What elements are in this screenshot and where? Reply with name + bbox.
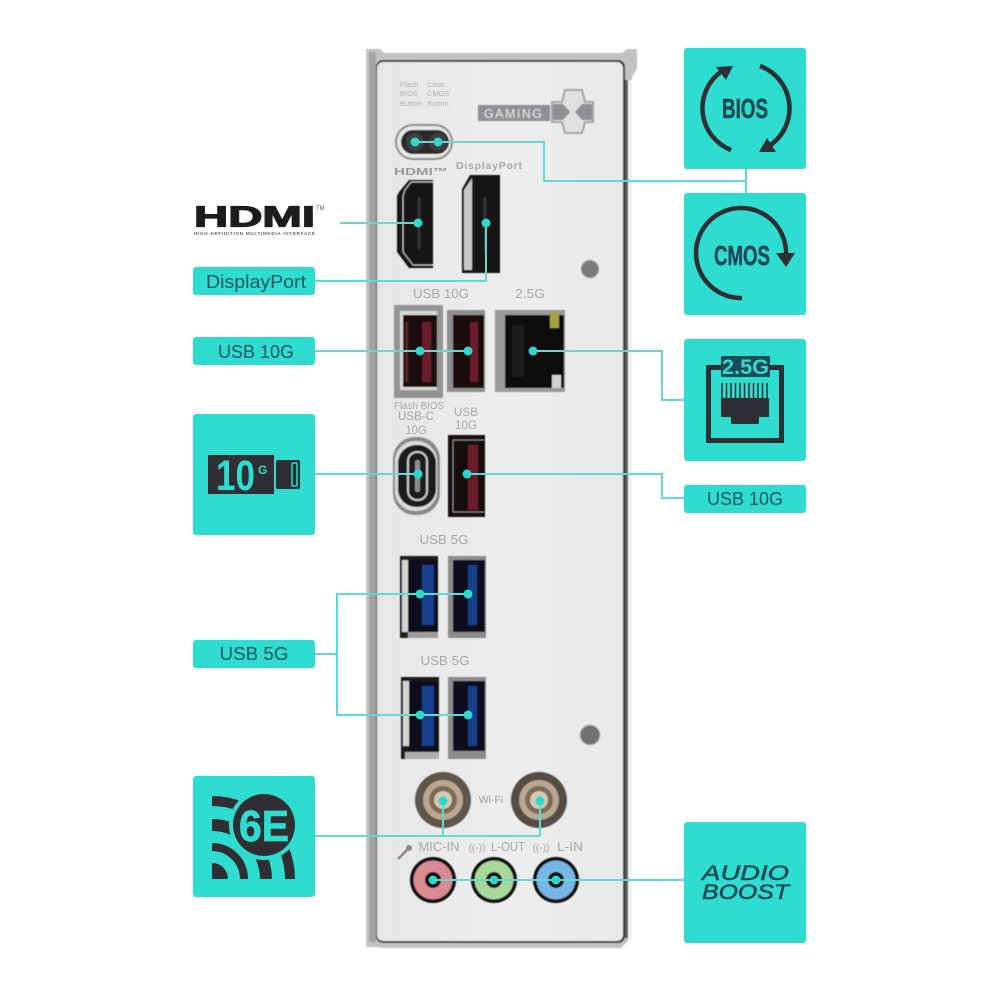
card: Wi-Fi 6E icon	[193, 776, 315, 897]
Wi-Fi label: Wi-Fi	[479, 794, 503, 806]
port: USB-C	[393, 437, 440, 515]
port: USB 10G third	[448, 435, 485, 517]
silk labels: USB 10G and 2.5G: USB-C	[398, 409, 434, 423]
label: USB 10G right: USB 10G	[707, 489, 783, 509]
silk labels: USB 10G and 2.5G: Flash BIOS	[394, 401, 444, 412]
label: USB 10G left	[193, 337, 315, 365]
label: DisplayPort	[193, 267, 315, 295]
card: 2.5G LAN icon	[684, 339, 806, 461]
card: Wi-Fi 6E icon: 6E	[239, 802, 289, 851]
gaming badge: GAMING	[484, 107, 542, 121]
port: RJ45 2.5G	[495, 310, 565, 392]
silk labels: USB 5G	[420, 532, 470, 668]
silk labels: HDMI and DisplayPort: DisplayPort	[456, 160, 522, 172]
port: USB 10G flash BIOS	[394, 305, 443, 398]
logo: HDMI: HDMI	[194, 202, 315, 234]
label: USB 10G left: USB 10G	[218, 342, 294, 362]
card: Audio Boost: BOOST	[702, 881, 792, 904]
button captions: CMOS	[427, 89, 450, 98]
silk labels: audio: ((◦))	[533, 843, 549, 854]
silk labels: USB 5G: USB 5G	[420, 532, 468, 547]
silk labels: audio: L-IN	[557, 839, 583, 854]
gaming badge	[478, 90, 593, 133]
silk labels: USB 10G and 2.5G: USB 10G	[413, 286, 469, 301]
silk labels: USB 10G and 2.5G: 10G	[455, 418, 477, 432]
button captions	[400, 80, 450, 108]
audio jacks	[410, 857, 579, 903]
card: USB-C 10G icon	[193, 414, 315, 535]
card: USB-C 10G icon: G	[258, 463, 267, 477]
button captions: Flash	[400, 80, 418, 89]
card: Audio Boost: AUDIO	[699, 862, 789, 885]
silk labels: USB 10G and 2.5G: USB	[454, 405, 478, 419]
Wi-Fi antenna connectors	[415, 772, 567, 828]
silk labels: USB 10G and 2.5G: 2.5G	[515, 286, 545, 301]
label: USB 10G right	[684, 485, 806, 513]
logo: HDMI: HIGH-DEFINITION MULTIMEDIA INTERFACE	[194, 231, 315, 236]
silk labels: audio: ((◦))	[469, 843, 485, 854]
card: CMOS clear icon: CMOS	[714, 240, 770, 271]
port: HDMI	[397, 180, 433, 268]
card: BIOS flash icon: BIOS	[722, 93, 768, 124]
silk labels: USB 10G and 2.5G: 10G	[406, 423, 426, 437]
label: USB 5G: USB 5G	[220, 644, 288, 664]
connector dots	[410, 138, 560, 884]
label: USB 5G	[193, 640, 315, 668]
button captions: Button	[400, 99, 422, 108]
silk labels: audio: MIC-IN	[418, 839, 460, 854]
silk labels: USB 10G and 2.5G	[394, 286, 545, 437]
screw lower	[580, 725, 600, 745]
silk labels: USB 5G: USB 5G	[420, 653, 470, 668]
card: BIOS flash icon	[684, 48, 806, 169]
card: 2.5G LAN icon: 2.5G	[722, 356, 769, 379]
screw upper	[581, 260, 599, 278]
silk labels: HDMI and DisplayPort: HDMI™	[394, 167, 448, 178]
port: DisplayPort	[462, 175, 500, 273]
logo: HDMI: TM	[316, 206, 325, 212]
card: Audio Boost	[684, 822, 806, 943]
logo: HDMI	[194, 202, 325, 236]
ports: USB 5G lower pair	[401, 677, 486, 759]
button captions: BIOS	[400, 89, 418, 98]
label: DisplayPort: DisplayPort	[206, 272, 306, 292]
card: USB-C 10G icon: 10	[216, 452, 255, 500]
card: CMOS clear icon	[684, 193, 806, 315]
panel: rear I/O shield	[366, 49, 637, 948]
ports: USB 5G upper pair	[400, 556, 486, 638]
button captions: Button	[427, 99, 449, 108]
connector lines	[315, 142, 746, 880]
port: USB 10G second	[447, 310, 485, 392]
flash BIOS and clear CMOS buttons	[395, 124, 453, 160]
silk labels: audio	[398, 839, 583, 859]
silk labels: HDMI and DisplayPort	[394, 160, 522, 178]
silk labels: audio: L-OUT	[491, 839, 525, 854]
button captions: Clear	[427, 80, 445, 89]
